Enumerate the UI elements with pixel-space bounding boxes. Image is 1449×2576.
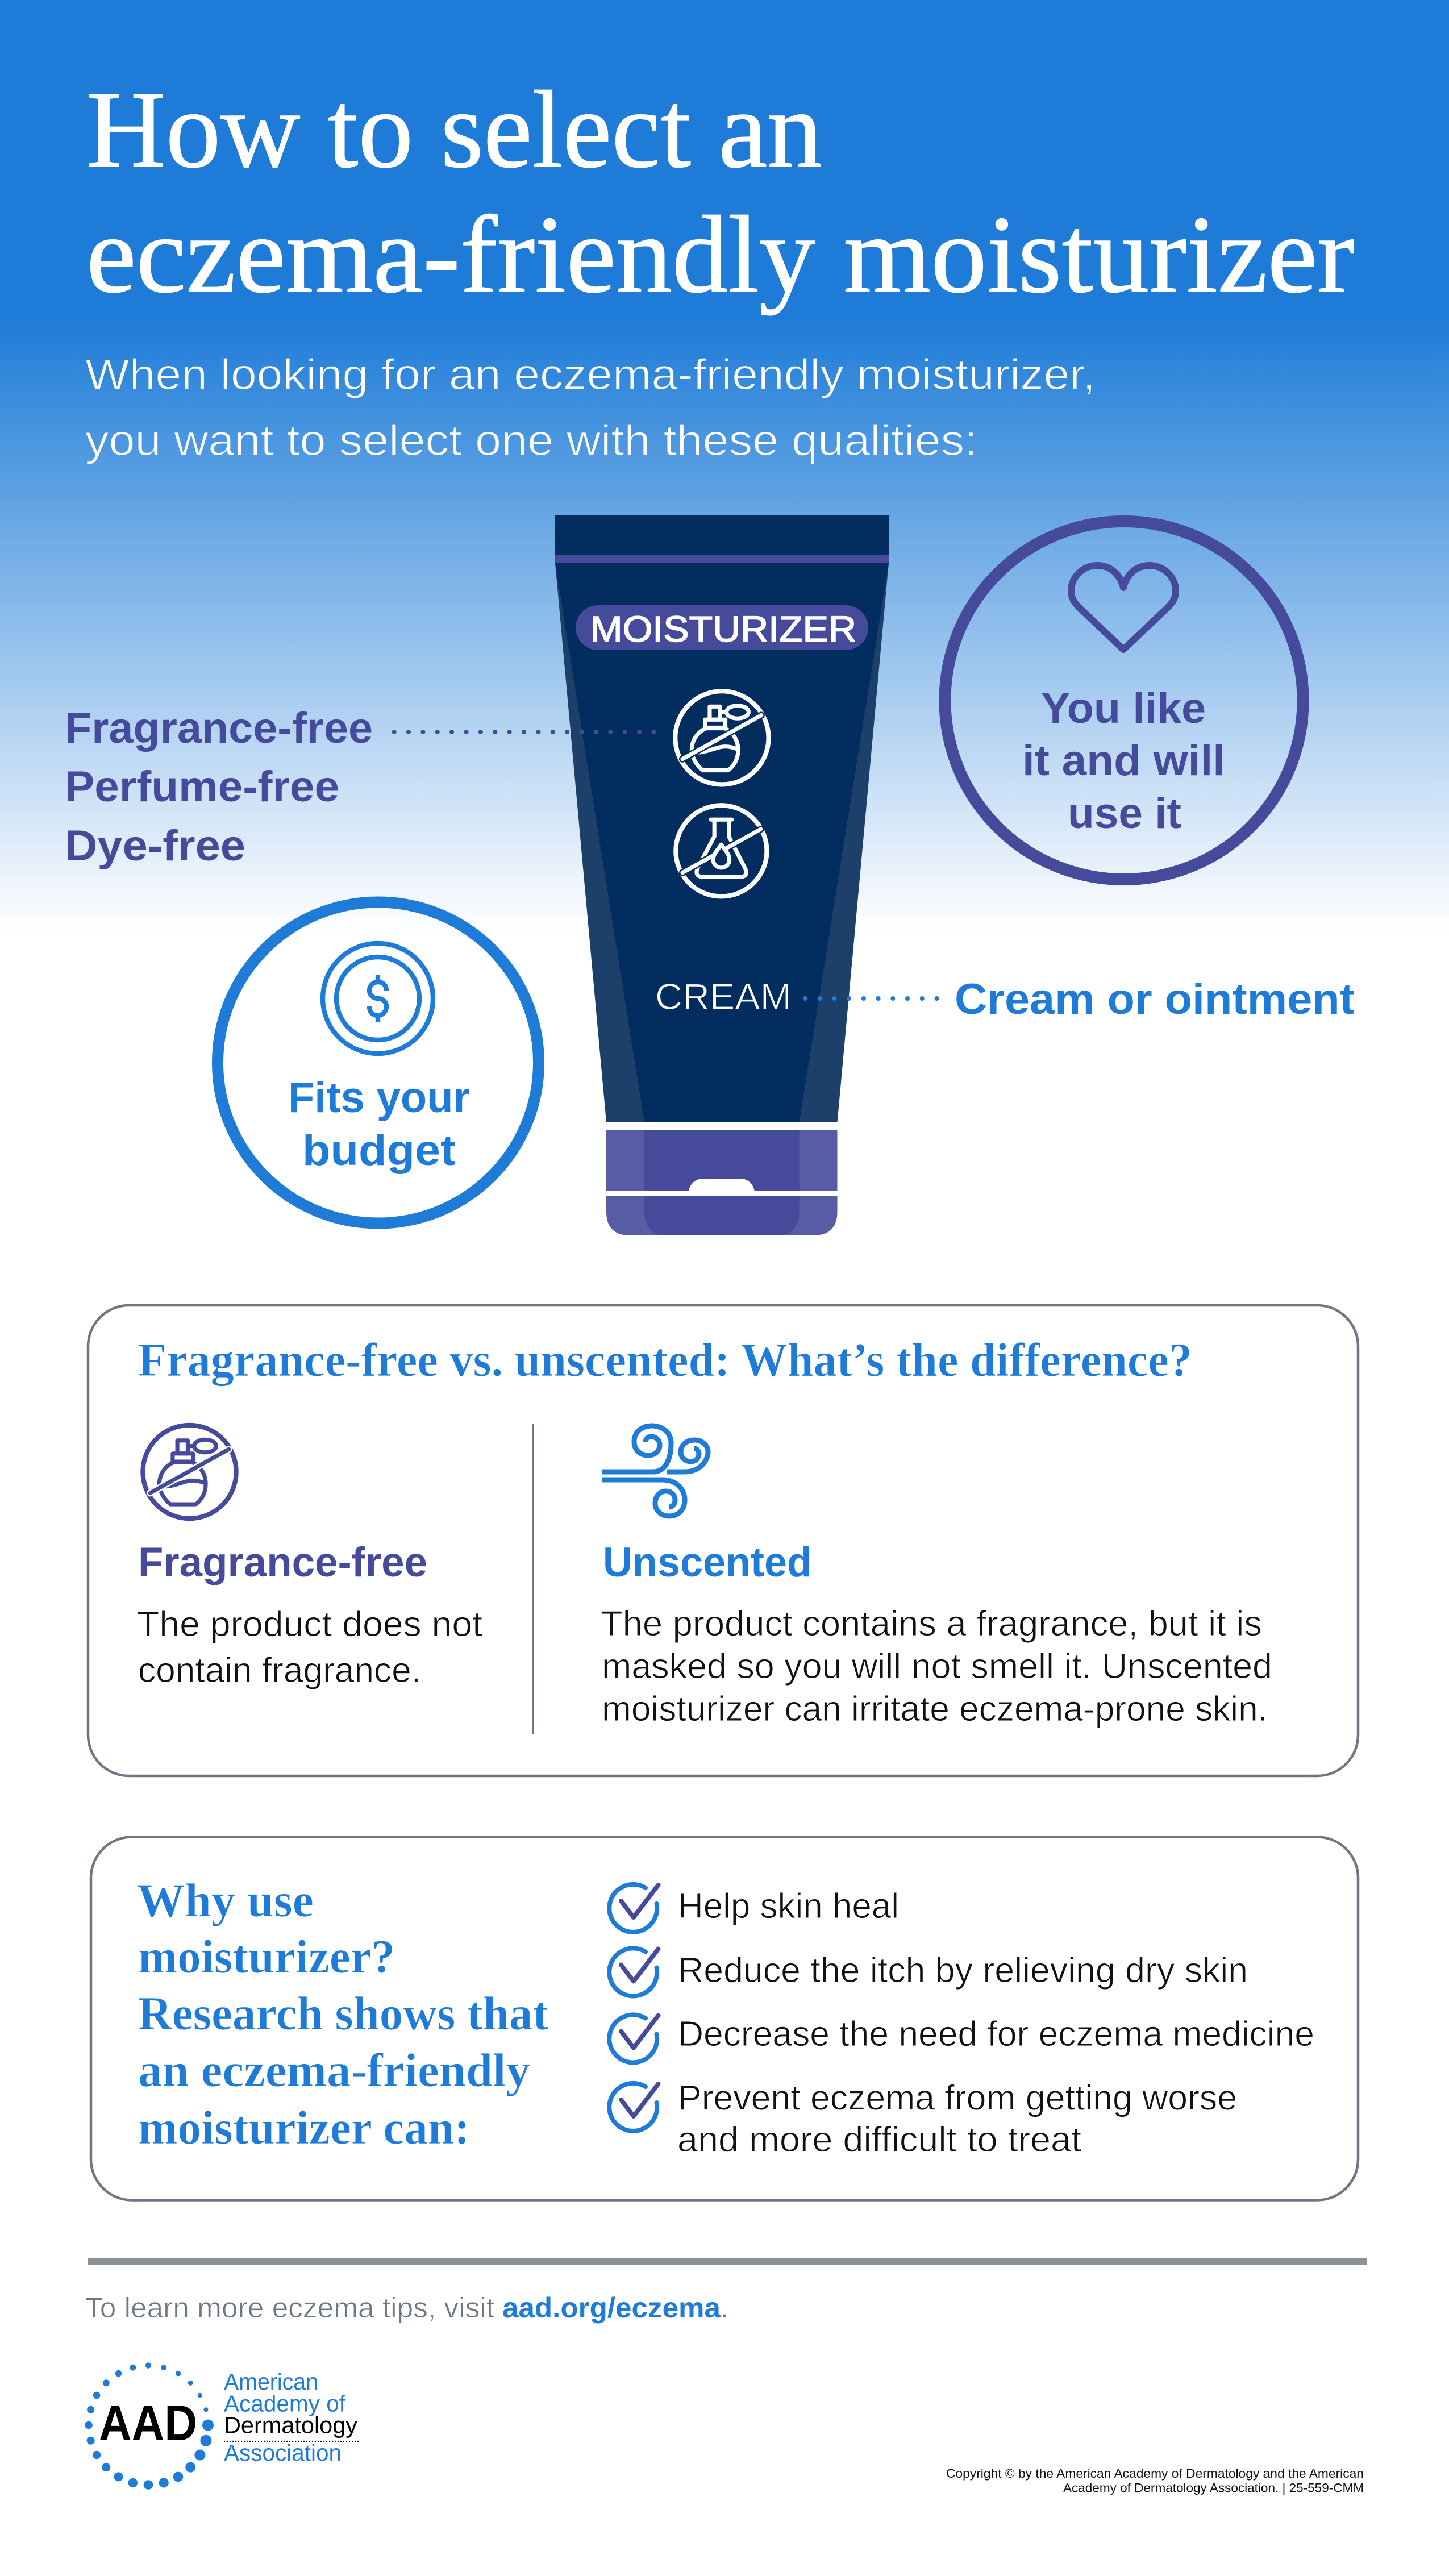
dotted connector to cream label [805, 996, 936, 1001]
icon: no dye flask [676, 805, 767, 896]
you like text: it and will [1022, 736, 1225, 785]
benefit: prevent eczema worsening: Prevent eczema from getting worse [678, 2079, 1237, 2117]
why use moisturizer heading [137, 1874, 548, 2154]
title [86, 68, 1355, 316]
fits your budget text [288, 1073, 470, 1175]
unscented subheading: Unscented [603, 1539, 812, 1585]
unscented description: moisturizer can irritate eczema-prone skin. [602, 1689, 1268, 1729]
free-from list: Perfume-free [65, 763, 339, 811]
icon: no fragrance bottle [675, 691, 769, 785]
unscented description [601, 1604, 1272, 1729]
icon: wind swirls [602, 1426, 708, 1516]
fragrance-free description: The product does not [137, 1605, 482, 1644]
fits your budget text: budget [302, 1126, 456, 1175]
unscented description: masked so you will not smell it. Unscented [602, 1647, 1272, 1686]
why use moisturizer heading: an eczema-friendly [138, 2044, 530, 2097]
divider [532, 1424, 534, 1734]
logo dot ring [85, 2362, 214, 2490]
title: eczema-friendly moisturizer [86, 193, 1355, 316]
tube cap [606, 1122, 838, 1235]
icon: dollar coin [323, 943, 433, 1054]
learn more line: aad.org/eczema [502, 2292, 721, 2324]
panel: why use moisturizer [91, 1837, 1358, 2200]
benefit: help skin heal [609, 1884, 899, 1932]
learn more line [85, 2292, 728, 2324]
why use moisturizer heading: Research shows that [138, 1987, 548, 2040]
title: How to select an [86, 68, 822, 190]
free-from list [65, 704, 373, 870]
benefit: reduce the itch: Reduce the itch by relieving dry skin [678, 1951, 1248, 1990]
moisturizer tube [555, 515, 889, 1235]
logo organization name [224, 2369, 361, 2466]
intro text: When looking for an eczema-friendly moisturizer, [85, 351, 1096, 399]
fragrance-free subheading: Fragrance-free [138, 1539, 427, 1585]
free-from list: Fragrance-free [65, 704, 373, 752]
intro text: you want to select one with these qualities: [85, 417, 977, 465]
learn more line: . [721, 2292, 728, 2324]
unscented description: The product contains a fragrance, but it is [601, 1604, 1262, 1643]
logo organization name: Dermatology [224, 2412, 357, 2438]
intro text [85, 351, 1096, 465]
dotted connector to fragrance icon [394, 730, 654, 734]
benefit: prevent eczema worsening: and more difficult to treat [677, 2120, 1081, 2159]
panel heading: Fragrance-free vs. unscented: What’s the difference? [138, 1334, 1192, 1387]
logo AAD letters: AAD [99, 2395, 197, 2451]
you like text: use it [1068, 789, 1181, 838]
tube body [555, 515, 889, 1122]
circle: fits your budget [218, 902, 539, 1223]
icon: heart [1071, 565, 1176, 650]
cream label: CREAM [655, 976, 792, 1017]
fragrance-free description: contain fragrance. [138, 1651, 421, 1690]
copyright: Copyright © by the American Academy of Dermatology and the American [946, 2466, 1364, 2481]
you like text [1022, 684, 1225, 838]
circle: you like it [945, 522, 1303, 880]
AAD logo [85, 2362, 361, 2490]
panel: fragrance-free vs unscented [88, 1305, 1358, 1776]
you like text: You like [1041, 684, 1206, 733]
why use moisturizer heading: moisturizer? [138, 1930, 395, 1983]
benefit: help skin heal: Help skin heal [678, 1887, 899, 1926]
copyright: Academy of Dermatology Association. | 25-559-CMM [1063, 2481, 1364, 2495]
learn more line: To learn more eczema tips, visit [85, 2292, 494, 2324]
logo organization name: Association [224, 2440, 342, 2466]
benefit: prevent eczema worsening [609, 2079, 1237, 2159]
fragrance-free description [137, 1605, 482, 1690]
callout: fragrance, perfume and dye free [65, 704, 654, 870]
moisturizer label: MOISTURIZER [590, 609, 856, 650]
logo organization name: Academy of [224, 2390, 346, 2416]
fits your budget text: Fits your [288, 1073, 470, 1122]
why use moisturizer heading: Why use [137, 1874, 314, 1927]
logo organization name: American [224, 2369, 318, 2395]
icon: no fragrance bottle purple [143, 1425, 236, 1518]
why use moisturizer heading: moisturizer can: [138, 2101, 470, 2154]
cream or ointment text: Cream or ointment [955, 975, 1355, 1023]
copyright [946, 2466, 1364, 2495]
benefit: decrease medicine need: Decrease the need for eczema medicine [678, 2015, 1314, 2054]
free-from list: Dye-free [65, 822, 245, 870]
footer rule [88, 2258, 1367, 2265]
